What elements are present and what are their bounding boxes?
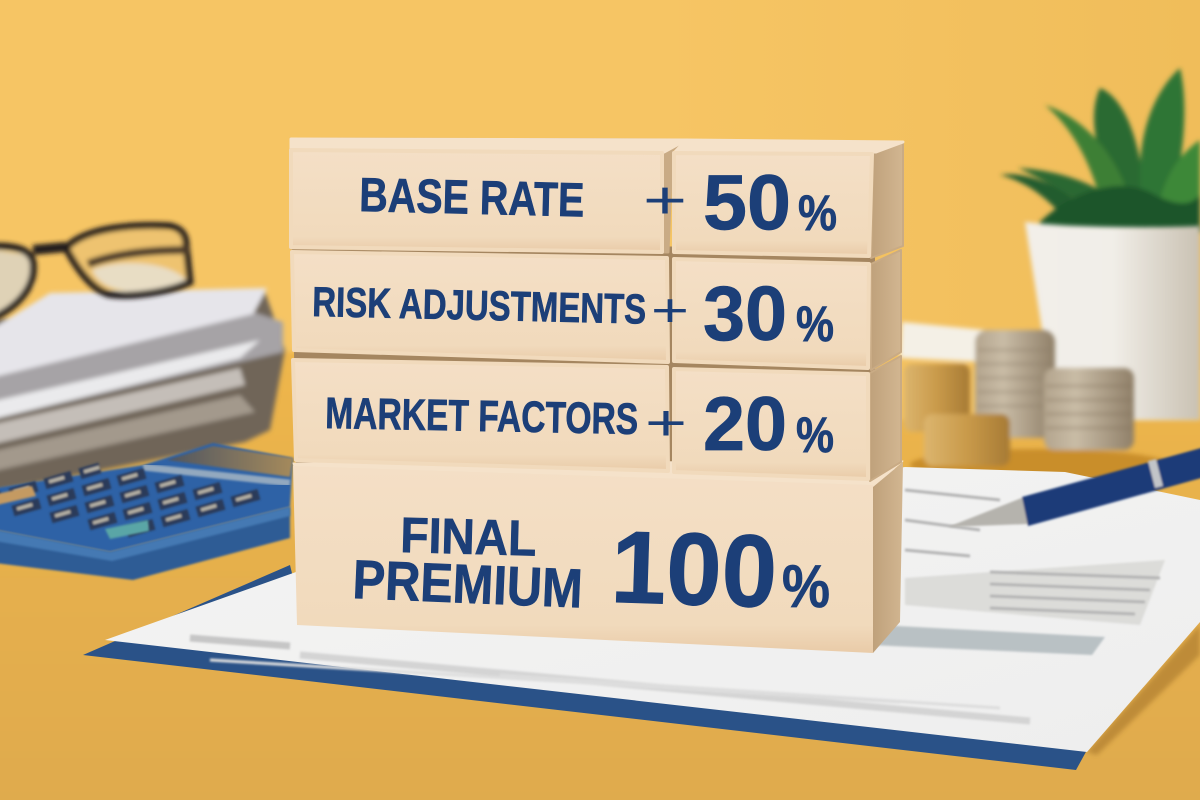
block: 30 percent: 30 (703, 271, 787, 357)
block: 50 percent: + (643, 170, 687, 229)
coin stacks (900, 322, 1170, 481)
block: 30 percent: % (796, 296, 834, 352)
block: final premium: 100 (609, 509, 779, 629)
block: 50 percent: 50 (703, 158, 791, 246)
block: 20 percent: % (796, 407, 834, 463)
block: 20 percent: + (645, 395, 687, 451)
pen (948, 447, 1200, 527)
block: final premium (293, 461, 903, 653)
calculator (0, 443, 293, 580)
block stack (291, 139, 903, 653)
block: risk adjustments: RISK ADJUSTMENTS (312, 278, 647, 333)
block: final premium: % (782, 553, 830, 620)
block: 50 percent (643, 140, 903, 258)
stacked paperwork (0, 288, 285, 492)
block: 50 percent: % (798, 185, 837, 241)
block: 20 percent (645, 356, 901, 481)
glasses (0, 226, 190, 317)
desk surface (0, 352, 1200, 800)
block: 30 percent (651, 250, 901, 370)
blue folder and document (83, 467, 1200, 770)
block: market factors: MARKET FACTORS (325, 389, 639, 444)
block: base rate (291, 139, 686, 252)
block: base rate: BASE RATE (359, 169, 585, 227)
plant in white pot (1000, 68, 1200, 420)
background wall (0, 0, 1200, 370)
block: 20 percent: 20 (703, 382, 787, 467)
block: final premium: FINAL (400, 507, 537, 567)
block: risk adjustments (292, 252, 668, 362)
block: 30 percent: + (651, 285, 689, 337)
block: final premium: PREMIUM (351, 548, 584, 620)
block: market factors (293, 360, 668, 471)
